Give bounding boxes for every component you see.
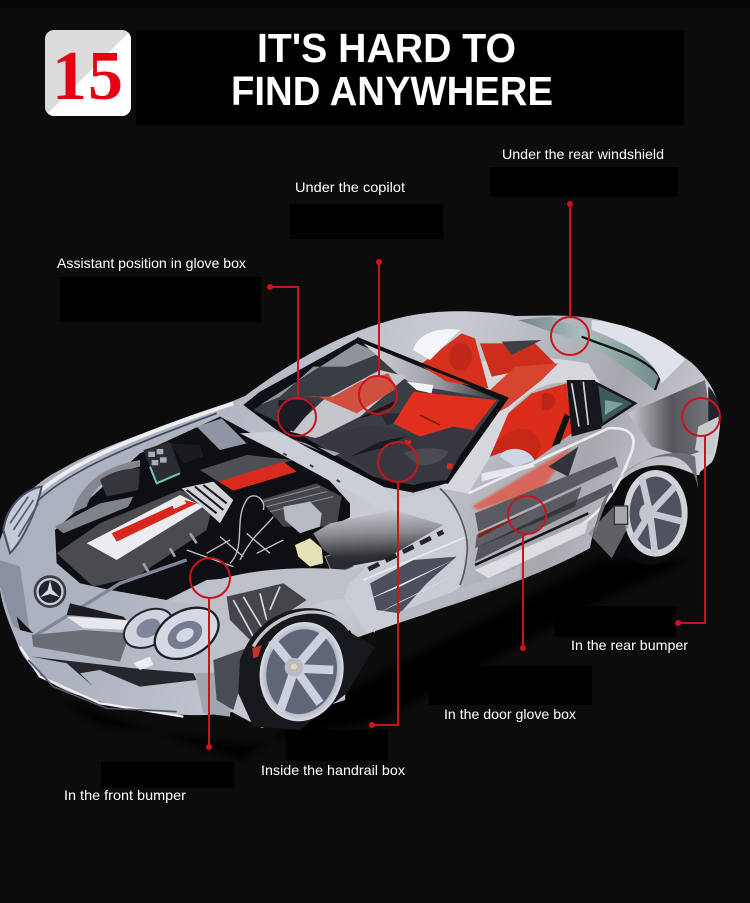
- callout: under the copilot: [290, 179, 443, 414]
- dash shadow: [278, 400, 315, 432]
- air tube: [313, 510, 443, 567]
- headlights: [117, 597, 227, 669]
- brake caliper: [588, 507, 628, 558]
- red engine cover strip: [112, 500, 197, 542]
- callout: inside the handrail box: Inside the handrail box: [261, 762, 405, 778]
- callout: assistant position in glove box: [57, 255, 316, 436]
- front left lamp: [3, 487, 42, 553]
- intake fan: [72, 460, 140, 513]
- radiator hood glass: [197, 418, 247, 450]
- callout: under the rear windshield: Under the rear windshield: [502, 146, 664, 162]
- door bars: [475, 457, 618, 532]
- vent slots row: [368, 532, 443, 569]
- front tyre tread: [213, 643, 260, 710]
- ground shadow: [60, 560, 690, 760]
- front half details: [0, 403, 375, 730]
- rear window glass: [518, 317, 660, 390]
- wheel arch and tyre: [238, 608, 375, 730]
- dashboard: [313, 425, 473, 483]
- tail light: [708, 387, 719, 432]
- grille: [67, 617, 133, 630]
- windshield and cabin: [240, 329, 507, 510]
- rear quarter panel: [628, 380, 715, 457]
- callout: in the front bumper: In the front bumper: [64, 787, 186, 803]
- callout: under the copilot: Under the copilot: [295, 179, 405, 195]
- title block: IT'S HARD TO: [257, 25, 516, 71]
- red top cylinder cover: [200, 455, 293, 482]
- red caliper: [252, 645, 262, 658]
- diagonal reflection: [290, 370, 407, 438]
- rocker: [400, 567, 520, 622]
- seat headrest: [420, 333, 488, 388]
- far seat: [303, 373, 397, 413]
- glass tint: [253, 343, 500, 485]
- air filter tube: [55, 497, 133, 533]
- callout: inside the handrail box: [261, 442, 418, 778]
- door seam: [440, 488, 467, 585]
- glass upper right: [363, 343, 500, 400]
- callout: in the front bumper: [64, 558, 234, 803]
- engine bay: [55, 417, 350, 600]
- rear half details: [440, 317, 719, 578]
- windshield frame: [243, 338, 507, 493]
- red seat: [393, 392, 497, 437]
- fuse box: [143, 442, 182, 483]
- lower bumper: [32, 657, 197, 687]
- white vent spikes: [363, 558, 487, 616]
- mirror: [482, 449, 535, 482]
- door red blur: [472, 447, 572, 510]
- far seat back: [480, 343, 555, 377]
- rear wheel: [611, 465, 689, 565]
- throttle housing: [283, 502, 322, 533]
- body silhouette: [0, 311, 720, 728]
- roof highlight: [413, 329, 460, 360]
- callout: in the door glove box: In the door glove box: [444, 706, 576, 722]
- car illustration: [0, 311, 720, 760]
- roof bar and A-pillar: [440, 357, 608, 493]
- pipes: [187, 496, 283, 567]
- fender surface: [170, 563, 375, 653]
- sill: [475, 520, 588, 578]
- coolant bottle: [295, 538, 323, 567]
- vent dark background: [370, 557, 457, 613]
- title block: FIND ANYWHERE: [231, 68, 553, 114]
- rear side window: [597, 383, 635, 425]
- engine cover: [57, 490, 213, 587]
- wheel arch: [595, 453, 698, 533]
- rear deck highlight: [592, 320, 685, 383]
- callout: assistant position in glove box: Assistant position in glove box: [57, 255, 246, 271]
- badge: number 15: 15: [52, 38, 123, 115]
- side panel base: [330, 488, 468, 633]
- front rim spokes: [272, 633, 333, 712]
- callout: in the door glove box: [429, 496, 592, 722]
- hood highlight lines: [20, 403, 233, 513]
- side intake and vents: [313, 488, 520, 633]
- callout: in the rear bumper: In the rear bumper: [571, 637, 688, 653]
- callout: under the rear windshield: [490, 146, 678, 355]
- red seat near headrest: [490, 363, 558, 417]
- cowl: [240, 432, 398, 510]
- nose panel: [0, 560, 30, 633]
- star emblem: [35, 577, 65, 607]
- door frame edge: [468, 428, 633, 527]
- wiper strip: [290, 438, 340, 457]
- windshield top frame: [357, 338, 507, 483]
- title block: [136, 25, 684, 125]
- glass upper left: [260, 343, 380, 405]
- manifold stripes: [182, 482, 233, 523]
- side window with driver seat: [490, 383, 572, 460]
- callout: in the rear bumper: [554, 398, 720, 653]
- right cylinder head: [260, 483, 342, 527]
